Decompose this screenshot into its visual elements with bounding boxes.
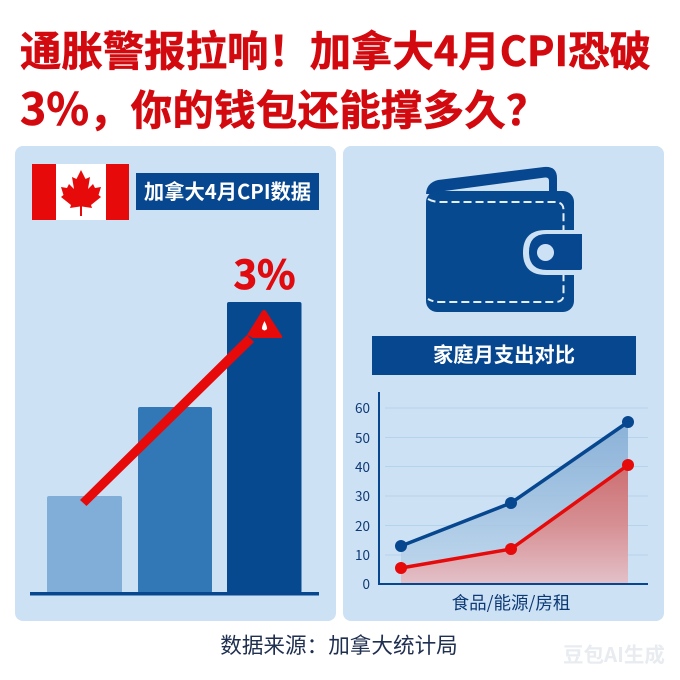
x-axis label: 食品/能源/房租 (452, 590, 570, 615)
red line (395, 459, 634, 574)
panel: CPI data (15, 146, 336, 621)
y-axis labels: 40 (355, 456, 370, 476)
title: 通胀警报拉响！加拿大4月CPI恐破 (20, 18, 651, 78)
y-axis labels (355, 397, 370, 593)
value label: 3%: 3% (233, 243, 296, 301)
panel heading: household monthly spending comparison (372, 336, 636, 375)
y-axis labels: 30 (355, 485, 370, 505)
title (20, 18, 651, 138)
y-axis labels: 20 (355, 515, 370, 535)
icon: wallet (426, 167, 583, 312)
panel heading: household monthly spending comparison: 家庭月支出对比 (433, 338, 575, 368)
y-axis labels: 0 (362, 573, 370, 593)
panel heading: Canada April CPI data: 加拿大4月CPI数据 (144, 175, 311, 205)
bar chart (30, 302, 319, 596)
panel: household spending (343, 146, 664, 621)
area: blue series (401, 422, 628, 568)
blue line (395, 416, 634, 552)
line chart (355, 392, 648, 615)
axes (379, 392, 648, 584)
source note: 数据来源：加拿大统计局 (220, 629, 458, 660)
icon: Canadian flag (32, 164, 129, 220)
watermark: 豆包AI生成 (563, 638, 665, 668)
area: red series (401, 465, 628, 583)
y-axis labels: 60 (355, 397, 370, 417)
title: 3%，你的钱包还能撑多久？ (20, 73, 548, 138)
arrow: rising trend (80, 310, 282, 506)
y-axis labels: 50 (355, 427, 370, 447)
y-axis labels: 10 (355, 544, 370, 564)
